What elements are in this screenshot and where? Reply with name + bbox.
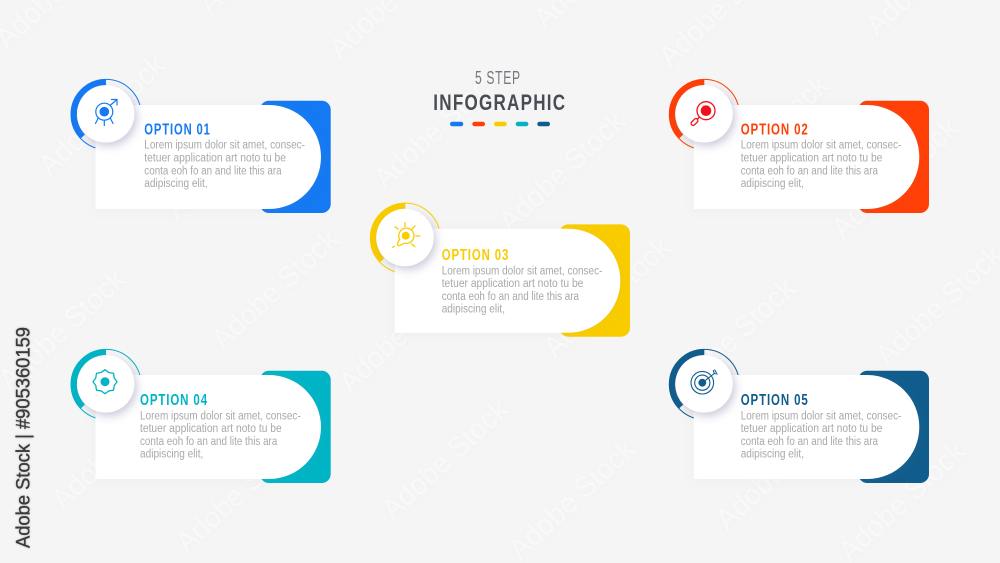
body text: tetuer application art noto tu be: [741, 423, 882, 435]
progress ring: [71, 349, 141, 419]
heading: OPTION 05: [741, 392, 809, 409]
body text: Lorem ipsum dolor sit amet, consec-: [140, 410, 301, 422]
panel: option 04: [71, 349, 331, 483]
subtitle: 5 step: 5 STEP: [475, 68, 521, 88]
body text: adipiscing elit,: [144, 178, 208, 190]
heading: OPTION 01: [144, 121, 211, 138]
heading: OPTION 03: [442, 247, 509, 264]
icon: target with arrow: [96, 100, 117, 126]
body text: conta eoh fo an and lite this ara: [144, 165, 282, 177]
body text: tetuer application art noto tu be: [741, 152, 882, 164]
body text: adipiscing elit,: [741, 178, 804, 190]
icon disc: [376, 209, 434, 266]
icon: gear badge: [93, 370, 117, 394]
stock id label: Adobe Stock | #905360159: [14, 327, 34, 548]
body text: [144, 140, 305, 190]
colour tab: [858, 371, 929, 483]
heading: infographic: INFOGRAPHIC: [433, 90, 566, 115]
watermark pattern: Adobe Stock: [160, 92, 299, 225]
colour tab: [260, 371, 331, 483]
body text: conta eoh fo an and lite this ara: [741, 165, 879, 177]
body text: tetuer application art noto tu be: [144, 152, 286, 164]
body text: conta eoh fo an and lite this ara: [741, 436, 879, 448]
title block: [433, 68, 566, 126]
watermark pattern: Adobe Stock: [826, 112, 965, 245]
watermark pattern: Adobe Stock: [493, 105, 632, 238]
progress ring: [71, 79, 141, 149]
body text: Lorem ipsum dolor sit amet, consec-: [144, 140, 305, 152]
heading: OPTION 02: [741, 121, 809, 138]
panel: option 01: [71, 79, 331, 213]
watermark pattern: Adobe Stock: [503, 433, 642, 563]
body text: [741, 410, 902, 461]
icon: magnifier: [690, 102, 715, 126]
panel: option 05: [669, 349, 929, 483]
watermark pattern: Adobe Stock: [368, 62, 507, 195]
body text: conta eoh fo an and lite this ara: [140, 436, 278, 448]
icon disc: [77, 355, 134, 412]
body text: [442, 265, 603, 316]
body text: adipiscing elit,: [442, 304, 505, 316]
colour tab: [858, 101, 929, 213]
body text: tetuer application art noto tu be: [442, 278, 583, 290]
watermark pattern: Adobe Stock: [376, 393, 515, 526]
watermark pattern: Adobe Stock: [206, 223, 345, 356]
progress ring: [669, 79, 739, 149]
body text: Lorem ipsum dolor sit amet, consec-: [741, 410, 902, 422]
progress ring: [370, 203, 440, 273]
icon disc: [77, 85, 134, 142]
icon: bullseye with dart: [691, 370, 717, 394]
progress ring: [669, 349, 739, 419]
body text: adipiscing elit,: [741, 449, 804, 461]
watermark pattern: Adobe Stock: [170, 426, 309, 559]
white card: [96, 375, 321, 479]
watermark pattern: Adobe Stock: [710, 403, 849, 536]
body text: adipiscing elit,: [140, 449, 203, 461]
colour tab: [559, 224, 630, 337]
icon disc: [675, 85, 733, 142]
watermark pattern: Adobe Stock: [333, 266, 472, 399]
colour tab: [260, 101, 331, 213]
body text: conta eoh fo an and lite this ara: [442, 291, 580, 303]
panel: option 02: [669, 79, 929, 213]
watermark pattern: Adobe Stock: [46, 383, 185, 516]
icon: light bulb: [393, 223, 420, 247]
heading: OPTION 04: [140, 392, 208, 409]
body text: [140, 410, 301, 461]
body text: Lorem ipsum dolor sit amet, consec-: [442, 265, 603, 277]
white card: [694, 105, 919, 209]
watermark pattern: Adobe Stock: [538, 231, 677, 364]
body text: Lorem ipsum dolor sit amet, consec-: [741, 140, 902, 152]
white card: [694, 375, 919, 479]
watermark pattern: Adobe Stock: [696, 69, 835, 202]
colour dash row: [450, 122, 550, 126]
body text: [741, 140, 902, 190]
white card: [395, 229, 620, 333]
stock id label: Adobe Stock | #905360159: [14, 327, 34, 548]
watermark pattern: Adobe Stock: [663, 272, 802, 405]
panel: option 03: [370, 203, 630, 337]
body text: tetuer application art noto tu be: [140, 423, 282, 435]
watermark pattern: Adobe Stock: [33, 49, 172, 182]
white card: [96, 105, 321, 209]
icon disc: [675, 355, 733, 412]
